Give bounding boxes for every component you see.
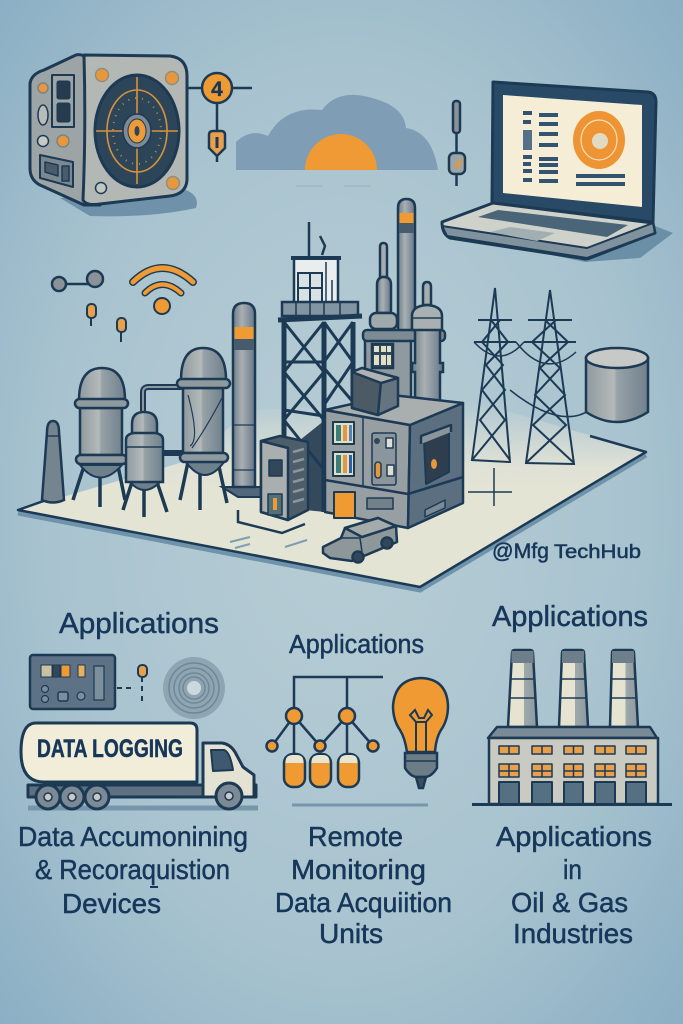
icon: connector probe <box>449 101 465 186</box>
icon: truck on platform <box>323 518 397 562</box>
panel: oil and gas <box>472 601 672 949</box>
icon: storage tank small <box>123 412 167 517</box>
text: data acquisition caption: Data Accumonining <box>18 821 248 852</box>
icon: factory with three chimneys <box>472 650 672 804</box>
brand handle <box>492 540 641 563</box>
icon: cylinder tank right <box>586 348 648 422</box>
icon: numbered node: 4 <box>211 78 223 101</box>
icon: rear stacks <box>370 199 415 340</box>
icon: platform marks <box>230 468 512 548</box>
text: oil and gas caption: Oil & Gas <box>511 887 628 918</box>
icon: pipe connector <box>143 387 184 453</box>
icon: wifi signal and nodes <box>52 268 193 342</box>
icon: concentric rings <box>163 657 225 719</box>
text: remote monitoring caption <box>275 821 452 949</box>
icon: small box on roof <box>352 368 398 415</box>
text: remote monitoring caption: Units <box>319 918 383 949</box>
text: oil and gas caption: Applications <box>496 821 652 852</box>
icon: small control building <box>261 436 308 520</box>
icon: storage tank tall <box>177 348 230 510</box>
text: data acquisition caption: Devices <box>62 888 161 919</box>
icon: data logging tanker truck: DATA LOGGING <box>37 735 183 763</box>
heading: applications right: Applications <box>492 601 648 633</box>
panel: remote monitoring <box>266 631 452 949</box>
text: oil and gas caption <box>496 821 652 949</box>
text: remote monitoring caption: Data Acquiition <box>275 887 452 918</box>
text: oil and gas caption: Industries <box>513 918 633 949</box>
icon: cloud and sun <box>236 95 438 186</box>
icon: lattice tower <box>278 222 362 512</box>
text: remote monitoring caption: Remote <box>308 821 403 852</box>
icon: mid plant block <box>363 282 445 408</box>
icon: control device <box>30 55 197 216</box>
heading: applications centre: Applications <box>289 631 424 659</box>
icon: data logging tanker truck <box>21 723 258 809</box>
icon: tall orange banded stack <box>222 303 262 497</box>
panel: data logging <box>18 608 258 919</box>
brand handle: TechHub <box>554 542 641 563</box>
text: oil and gas caption: in <box>563 854 582 885</box>
icon: transmission towers <box>472 288 590 464</box>
icon: numbered node <box>187 73 252 162</box>
heading: applications left: Applications <box>59 608 219 640</box>
industrial platform <box>18 400 646 590</box>
icon: light bulb <box>393 678 448 788</box>
icon: control panel <box>30 655 147 709</box>
text: data acquisition caption <box>18 821 248 919</box>
icon: tree diagram <box>266 677 428 805</box>
text: remote monitoring caption: Monitoring <box>291 854 426 885</box>
icon: laptop <box>442 82 673 262</box>
icon: storage tank left <box>73 368 128 507</box>
text: data acquisition caption: & Recoraquistion <box>35 854 230 885</box>
brand handle: @Mfg <box>492 540 549 563</box>
icon: main grey building <box>325 395 463 528</box>
icon: small chimney <box>42 421 64 502</box>
